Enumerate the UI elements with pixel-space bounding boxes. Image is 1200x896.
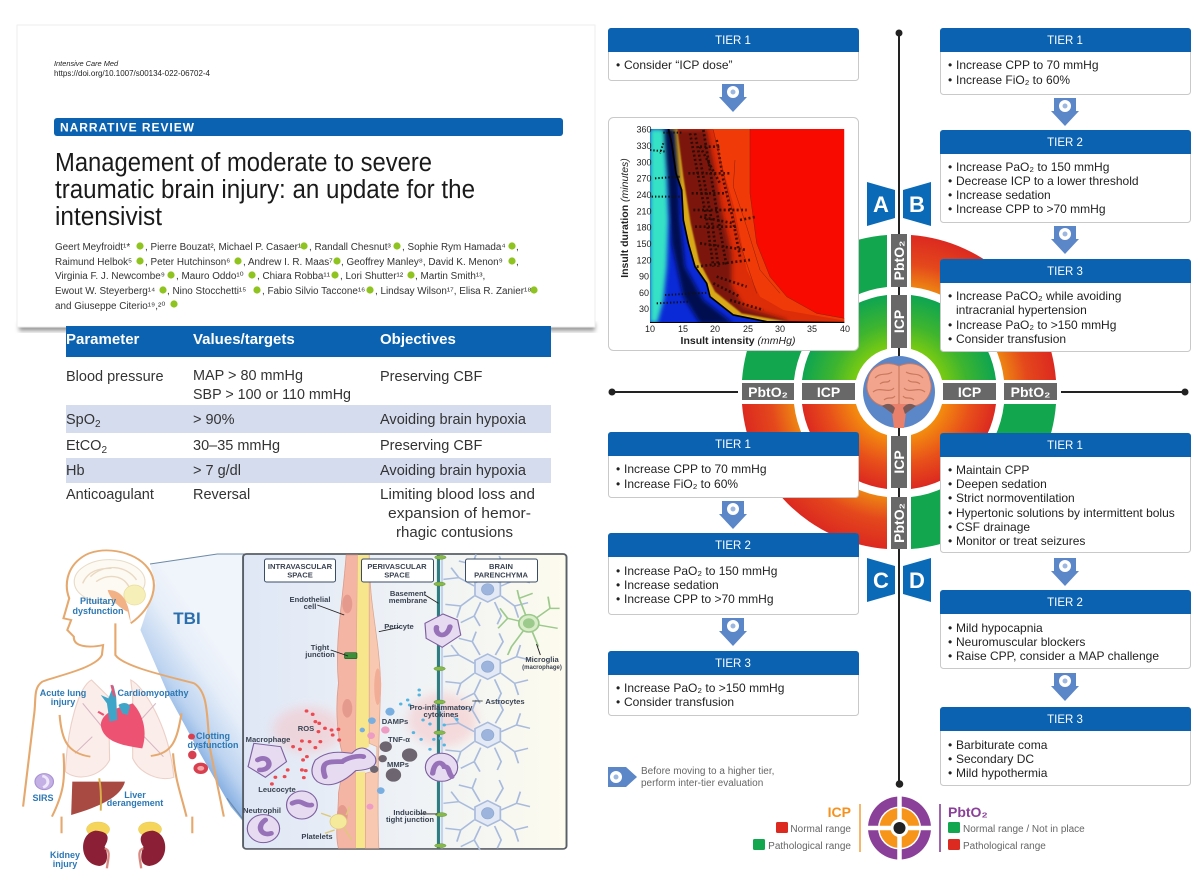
card: C tier 3: Increase PaO₂ to >150 mmHg [624,681,784,695]
cell labels: Tight [311,643,330,652]
basement membrane [434,555,447,848]
inner ring: ICP [802,295,996,489]
table header: Parameter [66,331,140,348]
heat map axes: 120 [636,256,652,266]
card: D tier 3: • [948,766,952,780]
quadrant wheel [742,234,1057,549]
card: D tier 3 [940,707,1191,786]
card: B tier 2: • [948,160,952,174]
cell labels: Pro-inflammatory [410,703,473,712]
row: SpO2: 2 [95,419,101,430]
card: D tier 1: • [948,534,952,548]
card: A tier 1 [608,28,859,80]
author list: , Martin Smith¹³, [415,271,485,282]
card: C tier 1 [608,432,859,498]
card: D tier 1: Strict normoventilation [956,491,1075,505]
brain [74,560,145,623]
card: D tier 3: • [948,738,952,752]
row: anticoagulant: rhagic contusions [396,525,513,541]
author list: , [516,242,519,253]
row: anticoagulant [66,487,535,541]
card: D tier 1 [940,433,1191,552]
cell labels: Microglia [525,655,559,664]
card: B tier 3: Consider transfusion [956,332,1066,346]
cytokine particles [399,688,459,751]
heat map axes: 330 [636,141,652,151]
card: A tier 1: TIER 1 [715,35,751,47]
organ labels: Cardiomyopathy [117,688,189,698]
card: D tier 2: TIER 2 [1047,597,1083,609]
author list: , Chiara Robba¹¹ [257,271,331,282]
quadrant flag C: C [873,568,889,593]
TBI label: TBI [173,609,201,628]
platelets [321,807,352,840]
card: D tier 2: Mild hypocapnia [956,621,1043,635]
quadrant flag B [903,182,931,226]
organ labels: derangement [107,798,163,808]
heat map axes: 210 [636,206,652,216]
ICP legend: Normal range [790,824,851,835]
heat map axes: 60 [639,288,649,298]
cell labels: cytokines [423,710,459,719]
SIRS cell [35,774,53,790]
author list: , Lindsay Wilson¹⁷, Elisa R. Zanier¹⁸ [375,286,531,297]
card: B tier 3: intracranial hypertension [956,303,1087,317]
body outline [23,550,224,833]
arrow [1051,226,1079,254]
column headings [264,559,538,582]
central axis lines [608,30,1188,788]
quadrant flag A: A [873,192,889,217]
card: B tier 3: • [948,332,952,346]
card: C tier 2: TIER 2 [715,540,751,552]
quadrant wheel: PbtO₂ [891,503,907,543]
row: anticoagulant: expansion of hemor- [388,506,531,522]
organ labels: SIRS [32,793,54,803]
row: Hb: Hb [66,463,85,479]
card: B tier 3: Increase PaO₂ to >150 mmHg [956,318,1116,332]
DAMPs [360,708,395,810]
arrow [719,618,747,646]
card: D tier 1: Monitor or treat seizures [956,534,1085,548]
heat map axes: 150 [636,239,652,249]
arrow [1051,673,1079,701]
author list: and Giuseppe Citerio¹⁹,²⁰ [55,301,165,312]
quadrant wheel: ICP [891,310,907,333]
card: C tier 2: • [616,564,620,578]
heat map axes: 40 [840,324,850,334]
card: B tier 1: • [948,73,952,87]
author list: , Sophie Rym Hamada⁴ [402,242,506,253]
row: anticoagulant: Limiting blood loss and [380,487,535,503]
card: C tier 3: TIER 3 [715,658,751,670]
card: D tier 3: Secondary DC [956,752,1034,766]
row: anticoagulant: Reversal [193,487,250,503]
cell labels: Neutrophil [243,806,281,815]
organ labels: Kidney [50,850,80,860]
card: D tier 1: • [948,477,952,491]
clotting blood cells [188,734,208,774]
row: anticoagulant: Anticoagulant [66,487,154,503]
row: blood pressure [66,368,482,403]
quadrant wheel: PbtO₂ [1011,384,1050,400]
cell labels: ROS [298,724,314,733]
author list: , Mauro Oddo¹⁰ [176,271,244,282]
inter-tier evaluation note: Before moving to a higher tier, [641,766,774,777]
cell labels: membrane [389,596,427,605]
card: C tier 1: TIER 1 [715,439,751,451]
card: D tier 3: TIER 3 [1047,714,1083,726]
author list: , Lori Shutter¹² [340,271,404,282]
astrocytes [443,554,530,850]
heat map axes: 240 [636,190,652,200]
row: SpO2: SpO [66,412,95,428]
card: B tier 2 [940,130,1191,222]
neurovascular unit panel [243,554,567,850]
card: B tier 1: • [948,58,952,72]
card: D tier 2: • [948,649,952,663]
author list: Raimund Helbok⁵ [55,257,132,268]
PbtO2 legend: Normal range / Not in place [963,824,1085,835]
author list: , [516,257,519,268]
author list: , Pierre Bouzat² [145,242,214,253]
card: A tier 1: • [616,58,620,72]
card: D tier 2: • [948,621,952,635]
card: A tier 1: Consider “ICP dose” [624,58,732,72]
card: D tier 3: • [948,752,952,766]
cell labels: TNF-α [388,735,410,744]
microglia [498,590,560,655]
heat map axes: 30 [775,324,785,334]
row: SpO2: Avoiding brain hypoxia [380,412,527,428]
card: C tier 2: Increase sedation [624,578,719,592]
card: B tier 2: Increase sedation [956,188,1051,202]
panel frame [243,554,567,849]
cell labels: Leucocyte [258,785,296,794]
table header: Values/targets [193,331,295,348]
quadrant flag D: D [909,568,925,593]
arrow [719,501,747,529]
systemic effects illustration [23,550,246,869]
article title: traumatic brain injury: an update for the [55,176,475,204]
card: C tier 3 [608,651,859,716]
card: B tier 1: TIER 1 [1047,35,1083,47]
author list: Geert Meyfroidt¹* [55,242,130,253]
card: D tier 1: Hypertonic solutions by intermittent bolus [956,506,1175,520]
card: B tier 2: • [948,174,952,188]
cell labels: Inducible [393,808,427,817]
heat map axes: 25 [743,324,753,334]
quadrant flag A [867,182,895,226]
card: D tier 2 [940,590,1191,668]
heat map axes: 30 [639,304,649,314]
organ labels: Pituitary [80,596,116,606]
card: D tier 1: Deepen sedation [956,477,1047,491]
author list: , Nino Stocchetti¹⁵ [167,286,246,297]
author list: , Randall Chesnut³ [309,242,391,253]
quadrant flag C [867,558,895,602]
heart [98,685,145,748]
card: B tier 2: TIER 2 [1047,137,1083,149]
card: C tier 3: • [616,681,620,695]
row: EtCO2: EtCO [66,438,101,454]
card: C tier 1: • [616,477,620,491]
row: SpO2 [66,405,551,433]
quadrant wheel: PbtO₂ [748,384,788,400]
MMPs [370,741,417,782]
ICP and PbtO2 tags [742,234,1057,549]
outer ring: PbtO2 [742,235,1056,549]
ICP dose heat map [608,118,858,350]
column headings: PARENCHYMA [474,570,528,580]
row: blood pressure: Blood pressure [66,369,164,385]
card: B tier 3: Increase PaCO₂ while avoiding [956,289,1121,303]
card: B tier 1: Increase CPP to 70 mmHg [956,58,1099,72]
cell labels: tight junction [386,815,434,824]
cell labels: Endothelial [290,595,330,604]
row: SpO2: > 90% [193,412,235,428]
arrow [1051,558,1079,586]
card: D tier 2: • [948,635,952,649]
arrow [1051,98,1079,126]
ICP legend: Pathological range [768,841,851,852]
tight junction [345,653,357,659]
card: B tier 3: • [948,289,952,303]
vessel wall [337,555,381,848]
journal article card [17,25,595,331]
inter-tier evaluation note [608,766,774,789]
author list: , Geoffrey Manley⁸, David K. Menon⁹ [341,257,503,268]
ICP legend [753,804,861,852]
author list: , Andrew I. R. Maas⁷ [243,257,333,268]
quadrant wheel: ICP [817,384,840,400]
card: C tier 3: • [616,695,620,709]
row: blood pressure: SBP > 100 or 110 mmHg [193,387,351,403]
card: C tier 2: • [616,578,620,592]
cell labels [243,589,562,841]
card: D tier 1: CSF drainage [956,520,1030,534]
cell labels: junction [304,650,335,659]
card: B tier 2: Decrease ICP to a lower threshold [956,174,1139,188]
cell labels: MMPs [387,760,409,769]
cell labels: Pericyte [384,622,414,631]
organ labels: dysfunction [72,606,124,616]
card: C tier 3: Consider transfusion [624,695,734,709]
article title: intensivist [55,203,162,231]
quadrant wheel: ICP [891,450,907,474]
article title: Management of moderate to severe [55,149,432,177]
journal citation: Intensive Care Med [54,59,119,68]
card: C tier 2: Increase PaO₂ to 150 mmHg [624,564,777,578]
card: B tier 2: • [948,188,952,202]
PbtO2 legend [939,804,1085,852]
row: EtCO2: Preserving CBF [380,438,482,454]
row: EtCO2 [66,438,482,456]
cell labels: (macrophage) [522,665,562,671]
leader lines [317,595,540,814]
cell labels: Basement [390,589,427,598]
cell labels: cell [304,602,316,611]
card: B tier 3 [940,259,1191,352]
row: EtCO2: 30–35 mmHg [193,438,280,454]
immune cells [247,614,461,843]
row: EtCO2: 2 [101,445,107,456]
column headings: PERIVASCULAR [367,562,427,571]
heat map axes: 300 [636,158,652,168]
heat map axes: 10 [645,324,655,334]
cell labels: DAMPs [382,717,408,726]
quadrant flag B: B [909,192,925,217]
cell labels: Macrophage [246,735,290,744]
journal citation [54,59,211,78]
PbtO2 legend: PbtO₂ [948,804,988,820]
card: C tier 2 [608,533,859,614]
card: B tier 2: • [948,202,952,216]
card: B tier 1: Increase FiO₂ to 60% [956,73,1070,87]
column headings: SPACE [384,570,410,580]
card: D tier 2: Raise CPP, consider a MAP challenge [956,649,1159,663]
row: blood pressure: MAP > 80 mmHg [193,368,303,384]
author list [55,242,538,312]
row: Hb: > 7 g/dl [193,463,241,479]
organ labels: injury [53,859,77,869]
table header: Objectives [380,331,456,348]
card: B tier 3: • [948,318,952,332]
row: blood pressure: Preserving CBF [380,369,482,385]
organ labels: Liver [124,790,146,800]
card: C tier 1: Increase CPP to 70 mmHg [624,462,767,476]
card: C tier 2: Increase CPP to >70 mmHg [624,592,774,606]
inter-tier evaluation note: perform inter-tier evaluation [641,778,763,789]
card: D tier 3: Mild hypothermia [956,766,1048,780]
card: D tier 3: Barbiturate coma [956,738,1048,752]
organ labels: Acute lung [40,688,86,698]
arrow [719,84,747,112]
card: D tier 1: TIER 1 [1047,440,1083,452]
quadrant wheel: ICP [958,384,981,400]
ICP dose heat map: Insult intensity (mmHg) [681,335,795,347]
heat map axes [636,124,850,334]
row: Hb: Avoiding brain hypoxia [380,463,527,479]
cell labels: Platelets [301,832,333,841]
inflammation glow [273,693,477,753]
wedge linking head to panel [140,554,246,825]
card: D tier 2: Neuromuscular blockers [956,635,1085,649]
card: D tier 1: • [948,491,952,505]
heat map axes: 20 [710,324,720,334]
column headings: SPACE [287,570,313,580]
kidneys [83,822,165,868]
cell labels: Astrocytes [485,697,525,706]
organ labels: Clotting [196,731,230,741]
heat map axes: 90 [639,272,649,282]
card: B tier 2: Increase PaO₂ to 150 mmHg [956,160,1109,174]
card: C tier 1: • [616,462,620,476]
card: D tier 1: Maintain CPP [956,463,1029,477]
heat map axes: 180 [636,222,652,232]
organ labels: dysfunction [188,740,238,750]
author list: Virginia F. J. Newcombe⁹ [55,271,165,282]
column headings: INTRAVASCULAR [268,562,333,571]
card: D tier 1: • [948,506,952,520]
article title [55,149,475,231]
card: D tier 1: • [948,463,952,477]
row: Hb [66,458,551,483]
author list: , Fabio Silvio Taccone¹⁶ [262,286,365,297]
section banner: narrative review: NARRATIVE REVIEW [60,120,195,134]
card: B tier 3: TIER 3 [1047,266,1083,278]
column headings: BRAIN [489,562,513,571]
heat map axes: 270 [636,174,652,184]
section banner: narrative review [54,118,563,136]
liver [71,782,125,815]
brain icon [863,356,935,428]
lungs [65,680,174,779]
ROS particles [270,709,341,786]
ICP dose heat map: Insult duration (minutes) [619,158,631,278]
journal citation: https://doi.org/10.1007/s00134-022-06702-4 [54,69,211,78]
quadrant flag D [903,558,931,602]
table header [66,326,551,357]
author list: , Peter Hutchinson⁶ [145,257,230,268]
author list: Ewout W. Steyerberg¹⁴ [55,286,155,297]
human body drawing [23,550,224,868]
targets table [66,326,551,541]
organ labels: injury [51,697,75,707]
card: B tier 2: Increase CPP to >70 mmHg [956,202,1106,216]
quadrant wheel: PbtO₂ [891,241,907,280]
heat map axes: 15 [678,324,688,334]
PbtO2 legend: Pathological range [963,841,1046,852]
heat map axes: 35 [807,324,817,334]
organ labels [32,596,238,869]
card: D tier 1: • [948,520,952,534]
target symbol [866,795,933,861]
card: C tier 2: • [616,592,620,606]
ICP legend: ICP [828,804,851,820]
heat map axes: 360 [636,124,652,134]
card: B tier 1 [940,28,1191,94]
author list: , Michael P. Casaer¹ [213,242,302,253]
card: C tier 1: Increase FiO₂ to 60% [624,477,738,491]
